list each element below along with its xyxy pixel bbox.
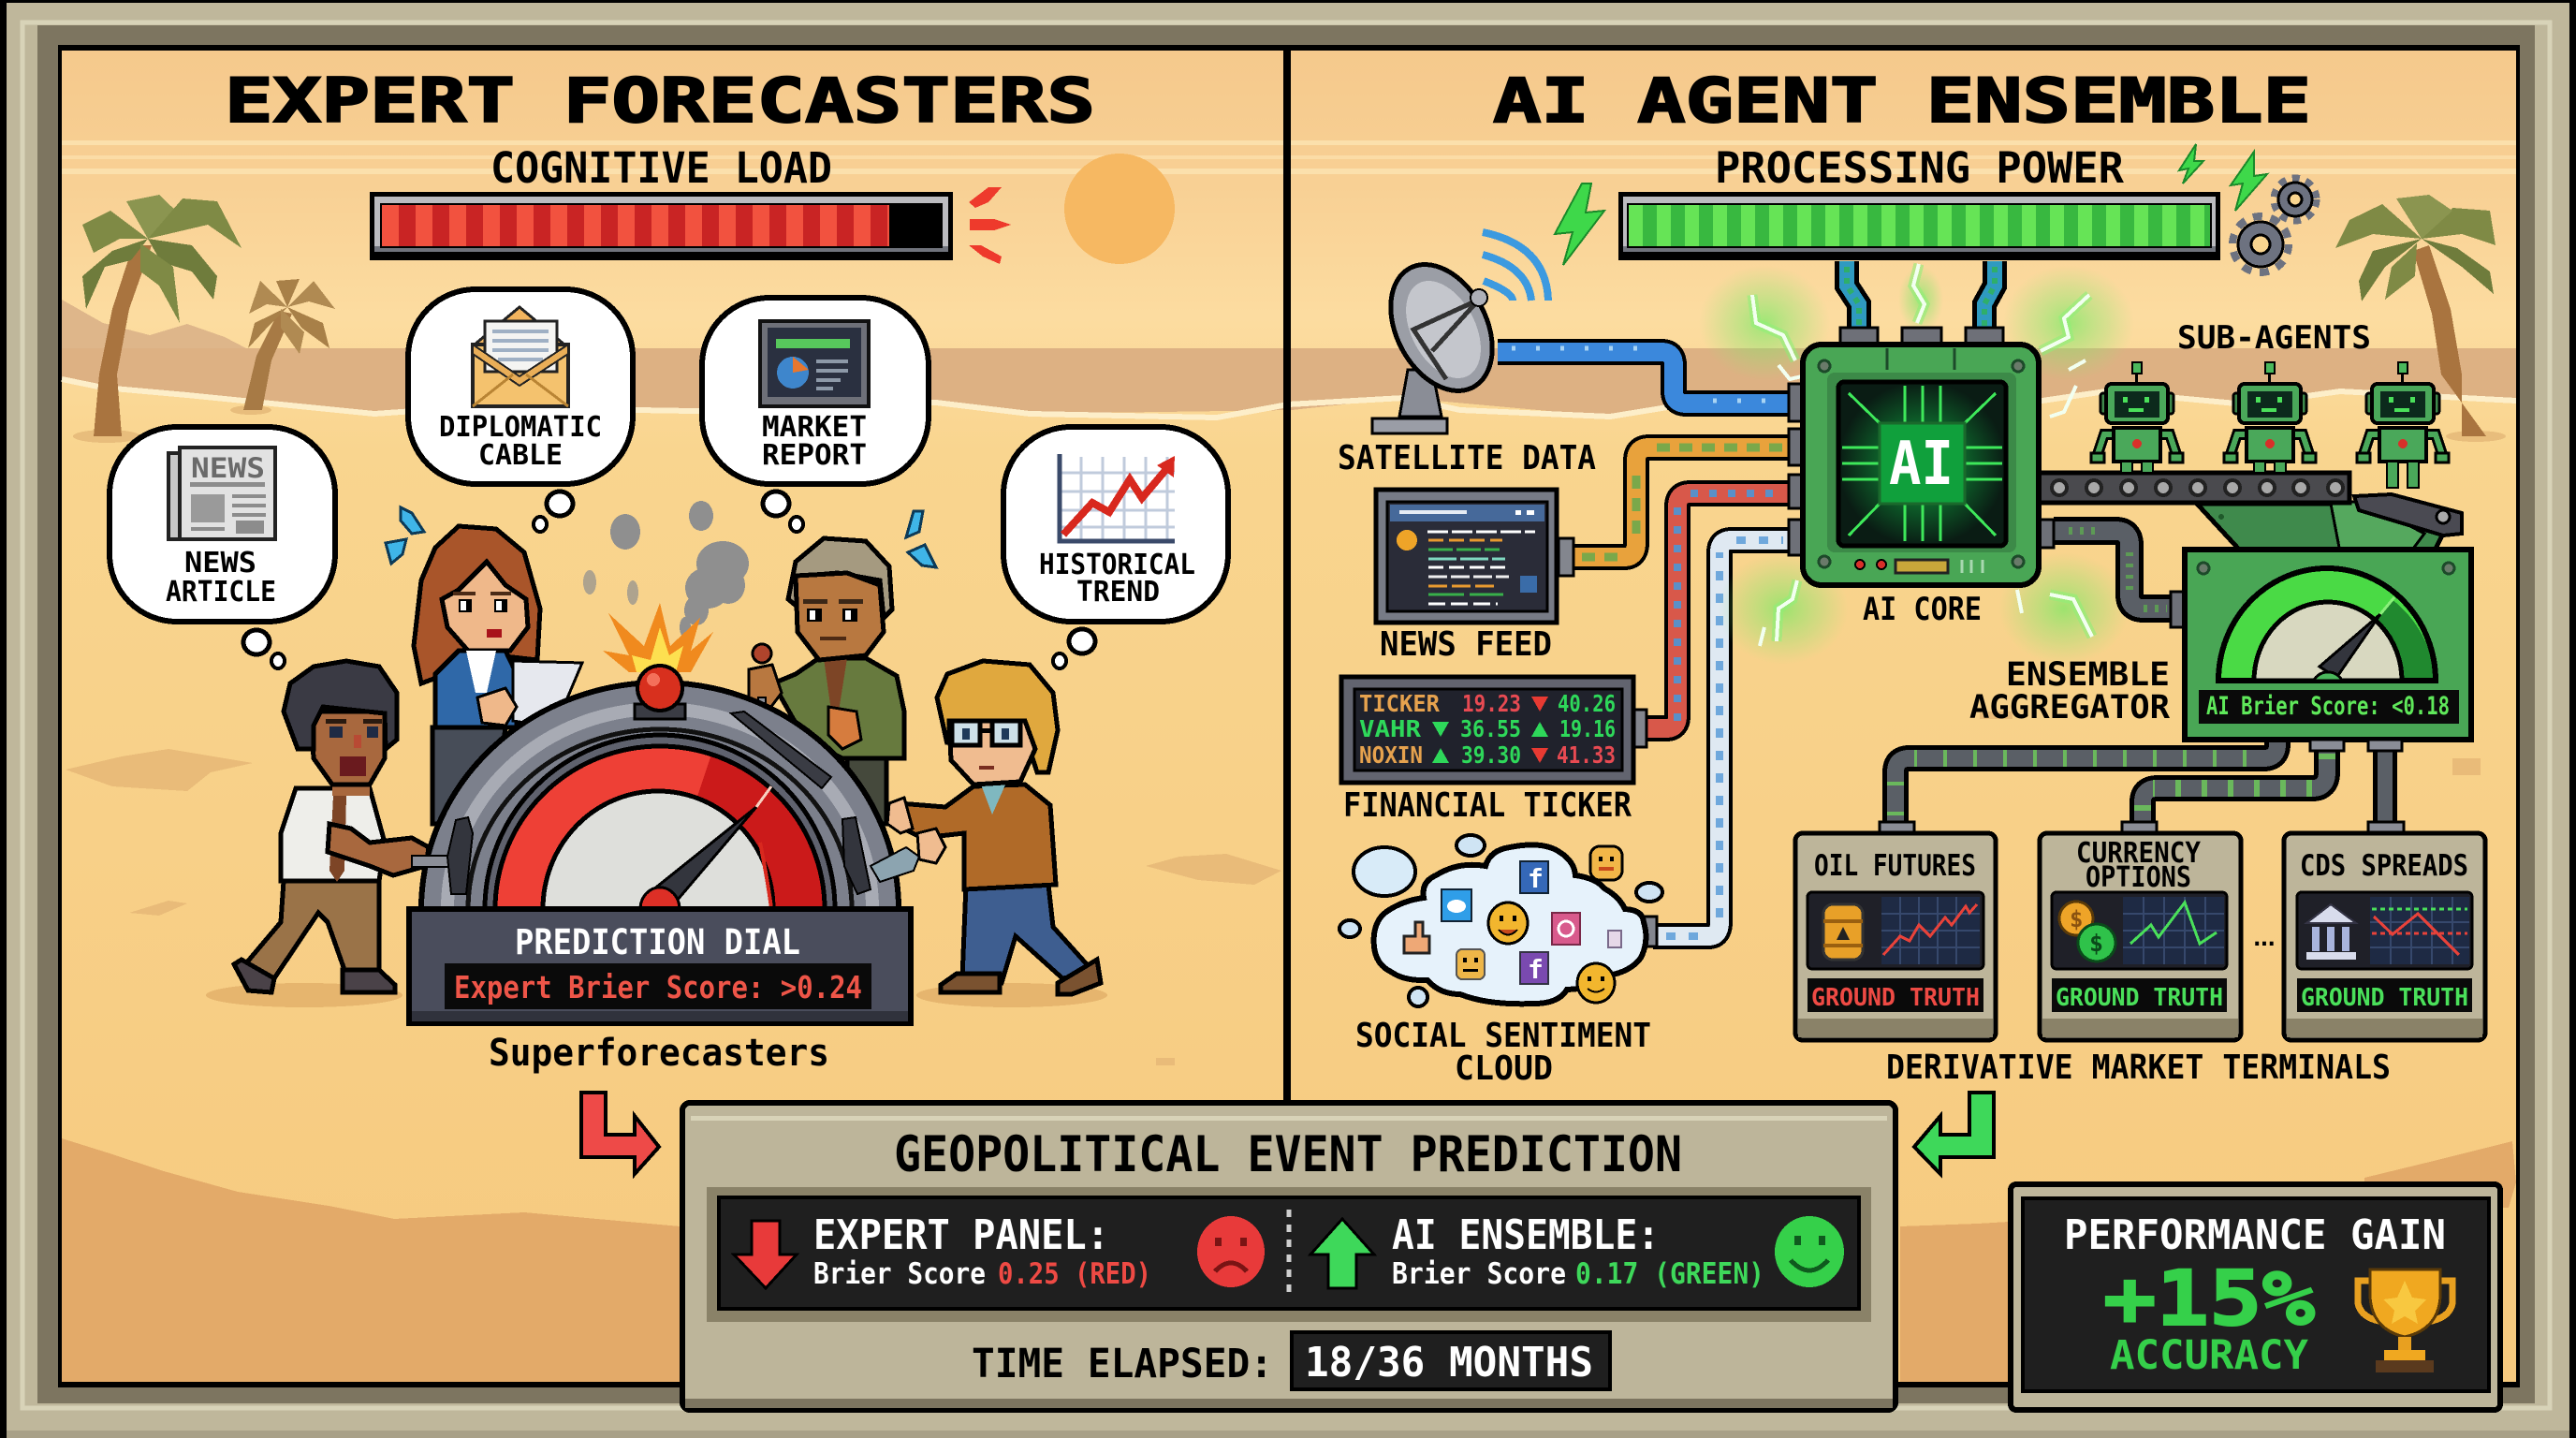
terminal: currency options: CURRENCY: [2076, 837, 2201, 870]
thought bubble: diplomatic cable: DIPLOMATIC: [439, 411, 602, 444]
icon: sad face: [1197, 1216, 1265, 1287]
title: expert forecasters: EXPERT FORECASTERS: [225, 66, 1095, 137]
expert score text: Expert Brier Score: >0.24: [454, 969, 862, 1005]
icon: purple facebook: [1520, 952, 1548, 985]
ensemble aggregator label: [1969, 656, 2171, 726]
thought bubble: market report: REPORT: [762, 439, 867, 472]
explosion flame: [603, 603, 713, 672]
icon: trend chart: [1060, 454, 1175, 541]
thought bubble: news article: ARTICLE: [166, 576, 276, 609]
financial ticker board: 36.55: [1460, 715, 1521, 742]
side grips: [412, 856, 459, 867]
derivative market terminals label: DERIVATIVE MARKET TERMINALS: [1886, 1049, 2391, 1087]
accuracy label: ACCURACY: [2110, 1332, 2308, 1379]
palm tree right: [2335, 195, 2506, 442]
circuit traces: [1842, 386, 2002, 541]
thought bubble: diplomatic cable: CABLE: [478, 439, 563, 472]
needle: [648, 807, 756, 906]
terminal: oil futures: GROUND TRUTH: [1811, 984, 1980, 1012]
terminal: CDS spreads: [2284, 822, 2485, 1040]
pipes: bar to core: [1847, 261, 1995, 330]
icon: green up arrow: [1310, 1219, 1374, 1288]
hopper: [2197, 504, 2443, 552]
pipe: satellite to core: [1498, 348, 1790, 404]
pipe: ticker to core: [1646, 493, 1790, 728]
icon: red down arrow: [734, 1221, 797, 1288]
financial ticker board: VAHR: [1359, 715, 1422, 742]
palm tree large left: [73, 195, 242, 443]
thought bubble: market report: [702, 298, 929, 532]
social sentiment cloud label: CLOUD: [1455, 1049, 1553, 1088]
icon: small badge: [1608, 931, 1621, 947]
AI ensemble text: AI ENSEMBLE:: [1392, 1211, 1660, 1259]
icon: twitter: [1442, 889, 1471, 921]
thought bubble: historical trend: [1003, 427, 1228, 668]
icon: coins: $: [2089, 930, 2103, 957]
strain sparks: [969, 187, 1011, 264]
conveyor and hopper: [2039, 473, 2462, 552]
cognitive load label: COGNITIVE LOAD: [490, 143, 832, 193]
satellite data label: SATELLITE DATA: [1338, 439, 1596, 477]
icon: bank: [2306, 904, 2356, 960]
pipe: social cloud to core: [1653, 540, 1790, 936]
center divider: [1283, 51, 1291, 1104]
financial ticker board: [1341, 677, 1647, 783]
thought bubble: diplomatic cable: [408, 289, 633, 532]
pipe: core to aggregator: [2054, 531, 2174, 609]
palm tree small left: [230, 279, 335, 415]
robot: sub-agent three: [2357, 362, 2449, 488]
dial base plate: [409, 909, 911, 1023]
arrow: green to prediction panel: [1914, 1093, 1994, 1174]
person: woman with paper: [414, 526, 582, 824]
pipes: aggregator to terminals: [1895, 740, 2385, 824]
icon: thumbs up: [1404, 922, 1429, 953]
icon: neutral emoji: [1456, 949, 1485, 979]
expert panel text: [813, 1211, 1151, 1291]
thought bubble: news article: NEWS: [184, 547, 256, 580]
thought bubble: historical trend: TREND: [1076, 576, 1160, 609]
icon: envelope: [473, 307, 568, 406]
icon: satellite dish: [1370, 232, 1548, 433]
AI core glow and lightning: [1699, 264, 2134, 665]
icon: coins: $: [2070, 906, 2083, 932]
thought bubble: news article: [110, 427, 335, 668]
AI ensemble text: Brier Score: [1392, 1257, 1566, 1291]
processing power bar: [1618, 192, 2220, 260]
social sentiment cloud label: [1355, 1017, 1651, 1088]
icon: smiling emoji: [1488, 902, 1528, 944]
robot: sub-agent two: [2224, 362, 2316, 473]
icon: coins: [2059, 902, 2115, 961]
financial ticker board: 40.26: [1558, 690, 1616, 717]
terminal: CDS spreads: GROUND TRUTH: [2301, 984, 2468, 1012]
financial ticker board: 19.23: [1462, 690, 1521, 717]
AI ensemble text: [1392, 1211, 1764, 1291]
panel: performance gain: [2011, 1184, 2500, 1410]
ensemble aggregator label: AGGREGATOR: [1969, 689, 2171, 726]
terminal: oil futures: [1795, 822, 1996, 1040]
financial ticker board: NOXIN: [1359, 741, 1423, 769]
financial ticker label: FINANCIAL TICKER: [1343, 786, 1632, 825]
AI score text: AI Brier Score: <0.18: [2206, 692, 2450, 721]
icon: grin emoji: [1577, 963, 1615, 1003]
icon: newspaper: [168, 448, 275, 539]
social sentiment cloud: [1339, 835, 1662, 1006]
performance gain heading: PERFORMANCE GAIN: [2064, 1211, 2446, 1259]
terminal: currency options: OPTIONS: [2086, 861, 2191, 894]
thought bubble: historical trend: HISTORICAL: [1039, 549, 1195, 581]
terminal: CDS spreads: CDS SPREADS: [2300, 849, 2468, 883]
title: AI agent ensemble: AI AGENT ENSEMBLE: [1493, 66, 2311, 137]
icon: oil barrel: [1823, 904, 1863, 960]
screws and status lights: [1819, 360, 2024, 567]
gauge face: [543, 791, 773, 909]
prediction dial: [409, 666, 919, 1023]
person: man right with glasses: [887, 661, 1107, 1007]
AI core label: AI CORE: [1863, 591, 1982, 628]
icon: lightning bolts: [1555, 144, 2267, 265]
pipe: news feed to core: [1573, 448, 1790, 557]
thought bubble: market report: MARKET: [762, 411, 867, 444]
dial housing arch: [421, 682, 899, 909]
sun: [1064, 154, 1175, 264]
top and side ports: [1789, 328, 2054, 555]
output ports: [2310, 740, 2344, 751]
time elapsed label: TIME ELAPSED:: [972, 1341, 1273, 1387]
cognitive load bar: [370, 192, 953, 260]
icon: trophy: [2358, 1269, 2452, 1372]
prediction dial label: PREDICTION DIAL: [515, 922, 800, 962]
icon: purple facebook: f: [1528, 954, 1544, 985]
icon: report tablet: [760, 321, 869, 406]
financial ticker board: 39.30: [1461, 741, 1521, 769]
icon: instagram: [1552, 913, 1580, 945]
icon: signal waves: [1483, 232, 1548, 301]
expert panel text: Brier Score: [813, 1257, 986, 1291]
panel title: GEOPOLITICAL EVENT PREDICTION: [894, 1126, 1682, 1183]
person: older man with lever: [749, 538, 904, 824]
news feed label: NEWS FEED: [1380, 625, 1552, 664]
processing power label: PROCESSING POWER: [1715, 143, 2125, 193]
time elapsed counter: 18/36 MONTHS: [1305, 1339, 1593, 1387]
robot: sub-agent one: [2091, 362, 2183, 473]
terminal: currency options: GROUND TRUTH: [2056, 984, 2223, 1012]
superforecasters label: Superforecasters: [489, 1032, 829, 1075]
AI ensemble text: 0.17 (GREEN): [1575, 1257, 1764, 1291]
expert score box: [445, 963, 871, 1009]
red gauge band: [495, 746, 711, 909]
+15% value: +15%: [2103, 1255, 2315, 1343]
ellipsis between terminals: ...: [2250, 925, 2278, 951]
ensemble aggregator label: ENSEMBLE: [2006, 656, 2170, 694]
AI core processor: [1789, 328, 2054, 585]
green gauge: [2218, 568, 2436, 681]
arrow: red to prediction panel: [581, 1093, 659, 1174]
panel: geopolitical event prediction: [682, 1103, 1895, 1410]
icon: facebook: [1520, 861, 1548, 894]
news feed monitor: [1376, 490, 1573, 623]
social sentiment cloud label: SOCIAL SENTIMENT: [1355, 1017, 1651, 1055]
ensemble aggregator: [2171, 550, 2471, 751]
smoke: [583, 501, 749, 638]
AI label: AI: [1889, 430, 1954, 499]
icon: newspaper: NEWS: [191, 452, 265, 484]
icon: happy emoji: [1590, 846, 1622, 880]
sub-agents label: SUB-AGENTS: [2177, 319, 2371, 357]
icon: facebook: f: [1528, 863, 1544, 894]
expert panel text: 0.25 (RED): [998, 1257, 1151, 1291]
terminal: oil futures: OIL FUTURES: [1814, 849, 1976, 883]
person: man left pushing: [206, 661, 429, 1007]
alarm button: [635, 704, 685, 719]
financial ticker board: 19.16: [1559, 715, 1616, 742]
icon: gears: [2232, 178, 2317, 272]
financial ticker board: 41.33: [1557, 741, 1616, 769]
financial ticker board: TICKER: [1359, 690, 1441, 717]
terminal: currency options: [2040, 822, 2241, 1040]
icon: sweat drops: [386, 507, 936, 567]
conveyor belt: [2039, 473, 2349, 503]
expert panel text: EXPERT PANEL:: [813, 1211, 1109, 1259]
AI score box: [2199, 690, 2459, 724]
icon: happy face: [1775, 1216, 1844, 1287]
